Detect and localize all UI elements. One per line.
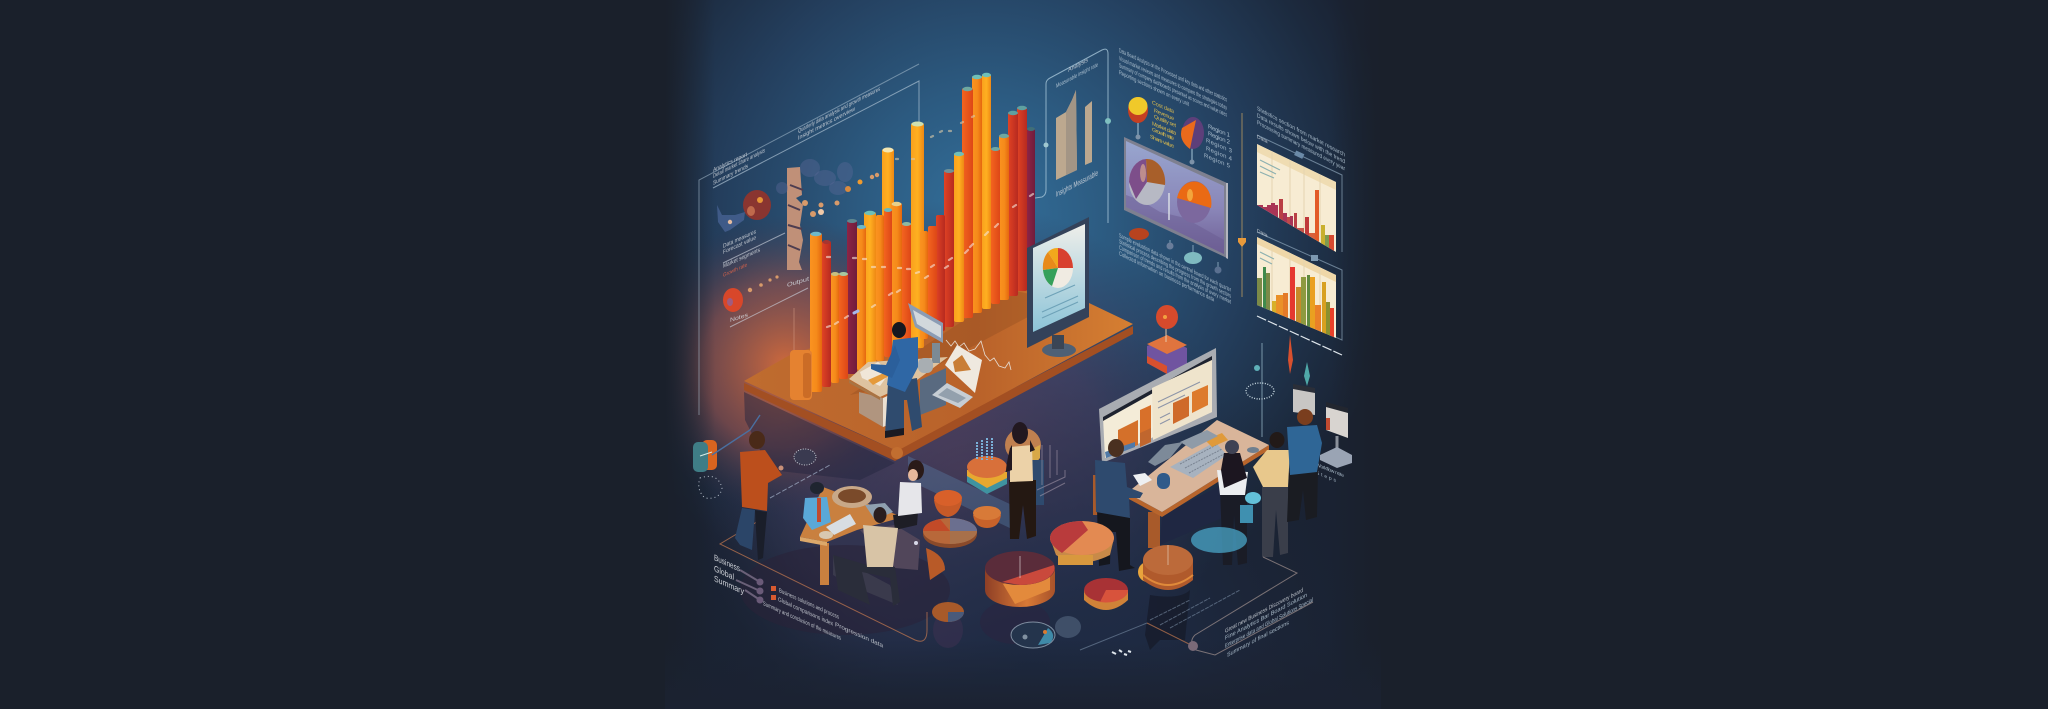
- person: man in orange: [735, 431, 784, 560]
- floor annotations bottom right: [1011, 557, 1313, 659]
- chair and table: [800, 487, 920, 605]
- large monitor with pie chart: [1027, 217, 1089, 357]
- meeting group left: [693, 415, 927, 650]
- labels: Global: [714, 563, 734, 582]
- text: left wall captions: Forecast value: [723, 234, 756, 256]
- desk: [849, 357, 948, 427]
- list: yellow labels: Growth rate: [1152, 127, 1174, 142]
- person: man at screen: [1095, 439, 1143, 571]
- pie on screen: [1043, 248, 1073, 288]
- text: left wall captions: Summary trends: [713, 163, 748, 187]
- list: blue labels: Region 4: [1206, 145, 1232, 163]
- divider with marker: [1238, 113, 1246, 297]
- chart: blob map: [717, 159, 853, 270]
- wall text right of woman: [1037, 445, 1065, 496]
- pie with spikes: [967, 438, 1007, 494]
- small disk: [932, 602, 964, 648]
- pie reflection orange: [926, 548, 945, 580]
- list: yellow labels: Share value: [1150, 134, 1174, 150]
- text: left wall captions: Output: [787, 275, 809, 289]
- icon: teal cylinder: [693, 415, 760, 472]
- text block bottom: Statistical process describing the progress from the growth sectors: [1119, 238, 1231, 300]
- bottom right text: Enterprise data and Global Solutions Special: [1225, 597, 1313, 650]
- legend text: Summary and conclusion of the measures: [763, 600, 841, 642]
- floor frame: [720, 520, 927, 641]
- labels: Summary: [714, 573, 744, 597]
- panel: central text and pies: [1119, 47, 1232, 306]
- legend text: [763, 587, 883, 650]
- device two: [1320, 402, 1352, 468]
- pie stacked orange: [1138, 545, 1193, 590]
- list: blue labels: Region 1: [1208, 123, 1230, 139]
- bar chart: tall cylinders: [790, 73, 1035, 400]
- legend text: Progression data: [835, 621, 883, 650]
- icon: red lollipop and box: [1147, 305, 1187, 374]
- text: left wall captions: Growth rate: [723, 262, 747, 279]
- list: blue labels: Region 2: [1208, 130, 1230, 146]
- line sketches: [946, 340, 1011, 370]
- bowl and keyboard: [819, 486, 893, 539]
- panel: right charts: Data: [1257, 228, 1268, 239]
- captions: Measurable insight rate: [1056, 61, 1098, 90]
- bottom right text: Fine Analytics Bar Board Solution: [1225, 592, 1307, 642]
- text block top: [1119, 47, 1227, 119]
- desk with large screen: [1093, 348, 1269, 548]
- captions: [1056, 57, 1098, 199]
- glass panel: [908, 456, 1014, 530]
- person: woman standing: [1006, 422, 1036, 539]
- panel: left wall annotations: [699, 64, 919, 415]
- desk monitor: [908, 303, 943, 373]
- pie display board: [1124, 137, 1228, 259]
- text block top: Reporting sections shown on every unit: [1119, 69, 1189, 108]
- text block right: Statistics section from market research: [1257, 105, 1345, 159]
- person: man in blue: [1287, 409, 1322, 522]
- icon: maroon ball: [743, 190, 771, 220]
- labels: [714, 552, 744, 597]
- text block right: Data results shown below with the trend: [1257, 112, 1345, 166]
- person: analyst: [871, 322, 922, 438]
- icon: purple orange ball: [1181, 117, 1204, 164]
- text block top: Visual market reviews and measures to compare the strategies today: [1119, 55, 1227, 112]
- text block right: Processing summary measured every year: [1257, 119, 1346, 173]
- items on desk: [1133, 447, 1259, 489]
- floor sketch text: [1150, 590, 1240, 628]
- captions: Insights Measurable: [1056, 168, 1098, 199]
- text: left wall captions: Notes: [730, 312, 748, 324]
- text block bottom: Collected information on business performance data: [1119, 250, 1214, 304]
- text block bottom: Comparison of trends and results from the analysis of every market: [1119, 244, 1231, 306]
- water puddle: [1191, 492, 1261, 553]
- text and line floor: [770, 465, 830, 498]
- laptop: [932, 345, 982, 408]
- cup stack two: [973, 506, 1001, 528]
- list: yellow labels: Cost data: [1152, 100, 1175, 115]
- small dotted icon: [699, 476, 722, 498]
- list: blue labels: Region 5: [1204, 152, 1230, 170]
- person: man in tan: [1253, 432, 1290, 557]
- person: seated man front: [833, 507, 900, 606]
- screen: [1099, 348, 1217, 463]
- legend markers: [736, 570, 776, 604]
- text: left wall captions: Quarterly data analysis and growth measures: [798, 86, 880, 135]
- desk top: [1127, 420, 1269, 517]
- dark reflection: [1145, 590, 1190, 650]
- pie layered red: [1050, 521, 1114, 565]
- cup stack one: [934, 490, 962, 517]
- legend markers: [1129, 228, 1222, 274]
- circle diagrams: [1011, 616, 1198, 655]
- list: yellow labels: Market data: [1152, 121, 1177, 137]
- list: yellow labels: [1150, 100, 1177, 150]
- sketch ring: [794, 449, 816, 465]
- text: left wall captions: Market segments: [723, 247, 760, 270]
- text: left wall captions: Insight metrics overview: [798, 105, 855, 142]
- text block bottom: Sample evaluation data shown in the central board for each quarter: [1119, 232, 1231, 294]
- mini bar chart: [1056, 90, 1092, 180]
- text: left wall captions: [713, 86, 880, 324]
- desk with person on platform: [849, 303, 1011, 438]
- device one: [1293, 384, 1315, 415]
- pie small slate: [923, 518, 977, 548]
- big pie: [985, 551, 1055, 607]
- platform: [744, 285, 1133, 461]
- list: blue labels: [1204, 123, 1232, 170]
- captions: Analysis: [1068, 57, 1088, 74]
- pie: right: [1177, 181, 1211, 223]
- pie: left: [1129, 159, 1165, 205]
- text block bottom: [1119, 232, 1231, 306]
- bottom right text: Summary of final sections: [1227, 619, 1289, 659]
- text block top: Summary of company dashboards presented as scores and value rates: [1119, 62, 1227, 119]
- icon: yellow ball: [1128, 97, 1148, 140]
- person: woman with bag: [1217, 440, 1248, 565]
- icons: top right gadgets: [1246, 335, 1352, 484]
- list: yellow labels: Quality set: [1154, 114, 1176, 129]
- icon: red orange ball: [723, 288, 743, 312]
- legend text: Business solutions and process: [779, 587, 839, 621]
- list: blue labels: Region 3: [1206, 137, 1232, 155]
- panel: right charts: [1257, 105, 1346, 355]
- person: seated blue: [803, 482, 831, 530]
- chart 2: [1257, 237, 1336, 338]
- text: left wall captions: Detail market share analysis: [713, 147, 765, 180]
- icons: top right gadgets: Workflow note: [1316, 462, 1344, 479]
- list: yellow labels: Revenue: [1154, 108, 1174, 122]
- text: left wall captions: Data measures: [723, 228, 756, 250]
- bottom right text: Great new Business Discovery board: [1225, 587, 1303, 635]
- people at large screen: [1095, 409, 1322, 571]
- icons: top right gadgets: Steps: [1316, 470, 1336, 484]
- panel: framed bars: [1035, 49, 1111, 223]
- desk underside: [1093, 475, 1222, 548]
- text: left wall captions: Analytics report: [713, 151, 747, 174]
- person: seated woman: [893, 460, 924, 530]
- pie stacks centre: [908, 422, 1193, 650]
- text block top: Data Board Analysis on the Processed and key data and other statistics: [1119, 47, 1227, 104]
- shadow stack: [980, 600, 1050, 644]
- dotted bead trails: [728, 173, 879, 292]
- panel: right charts: Data: [1257, 134, 1268, 145]
- pie small red: [1084, 578, 1128, 610]
- back pie: [1005, 428, 1044, 505]
- keyboard: [1148, 430, 1228, 478]
- labels: Business: [714, 552, 740, 574]
- dashed white data trails: [827, 116, 1033, 327]
- chart 1: [1257, 144, 1336, 252]
- legend text: Global comparisons index: [778, 596, 834, 628]
